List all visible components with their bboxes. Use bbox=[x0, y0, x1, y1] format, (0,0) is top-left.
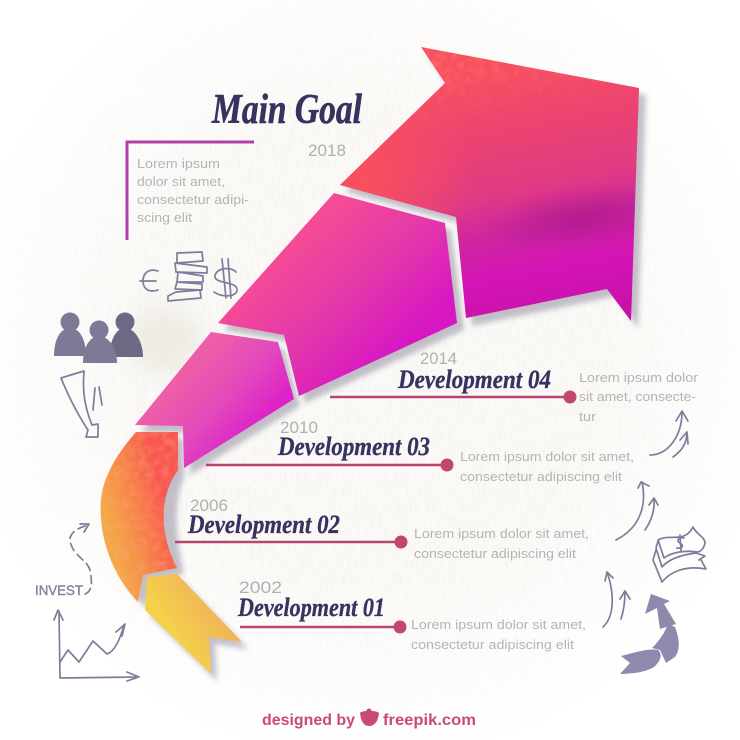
segment: development 03 bbox=[135, 332, 294, 468]
main goal description: consectetur adipi- bbox=[137, 193, 249, 207]
credit: designed by freepik bbox=[262, 708, 476, 729]
development 03: Development 03 bbox=[277, 432, 430, 461]
development 01: 2002 bbox=[239, 578, 282, 597]
icon: banknotes bbox=[653, 527, 706, 582]
development 02: 2006 bbox=[190, 496, 228, 515]
development 04 bbox=[330, 349, 698, 424]
development 01 bbox=[237, 578, 586, 652]
main goal description: dolor sit amet, bbox=[137, 175, 225, 189]
development 04: sit amet, consecte- bbox=[579, 390, 696, 404]
icon: three people bbox=[54, 312, 143, 363]
paper background bbox=[55, 32, 690, 668]
icon: sketched down arrow bbox=[61, 371, 102, 437]
development 02 bbox=[175, 496, 589, 561]
icon: invest dashed arrow bbox=[35, 524, 91, 598]
segment: development 04 bbox=[218, 193, 457, 396]
development 01: consectetur adipiscing elit bbox=[411, 638, 575, 652]
development 04: Lorem ipsum dolor bbox=[579, 371, 698, 385]
main goal description bbox=[127, 142, 254, 240]
arrow shadows bbox=[107, 54, 646, 681]
title: Main Goal: Main Goal bbox=[211, 87, 362, 133]
main goal description: Lorem ipsum bbox=[137, 157, 220, 171]
development 01: Development 01 bbox=[237, 593, 385, 622]
development 03: consectetur adipiscing elit bbox=[460, 470, 623, 484]
development 04: tur bbox=[579, 410, 596, 424]
icon: euro, coin stack, dollar bbox=[140, 252, 237, 301]
segment: top arrow head bbox=[340, 47, 639, 321]
development 02: Lorem ipsum dolor sit amet, bbox=[414, 527, 589, 541]
segment: development 02 curved bbox=[101, 432, 178, 602]
development 03: 2010 bbox=[280, 418, 318, 437]
icon: line chart bbox=[54, 610, 139, 681]
growth arrow bbox=[101, 47, 646, 681]
development 02: consectetur adipiscing elit bbox=[414, 547, 577, 561]
development 03: Lorem ipsum dolor sit amet, bbox=[460, 450, 634, 464]
development 04: Development 04 bbox=[397, 365, 551, 394]
credit: designed by freepik: freepik.com bbox=[383, 712, 476, 729]
icon: upward sketch arrows bbox=[603, 411, 688, 627]
year 2018: 2018 bbox=[308, 141, 346, 160]
icon: big segmented arrow bbox=[620, 594, 679, 674]
development 01: Lorem ipsum dolor sit amet, bbox=[411, 618, 586, 632]
main goal description: scing elit bbox=[137, 211, 193, 225]
development 04: 2014 bbox=[420, 349, 457, 368]
development 02: Development 02 bbox=[187, 510, 340, 539]
icon: invest dashed arrow: INVEST bbox=[35, 583, 83, 598]
development 03 bbox=[206, 418, 634, 484]
segment: development 01 tail bbox=[145, 574, 242, 674]
credit: designed by freepik: designed by bbox=[262, 712, 355, 729]
